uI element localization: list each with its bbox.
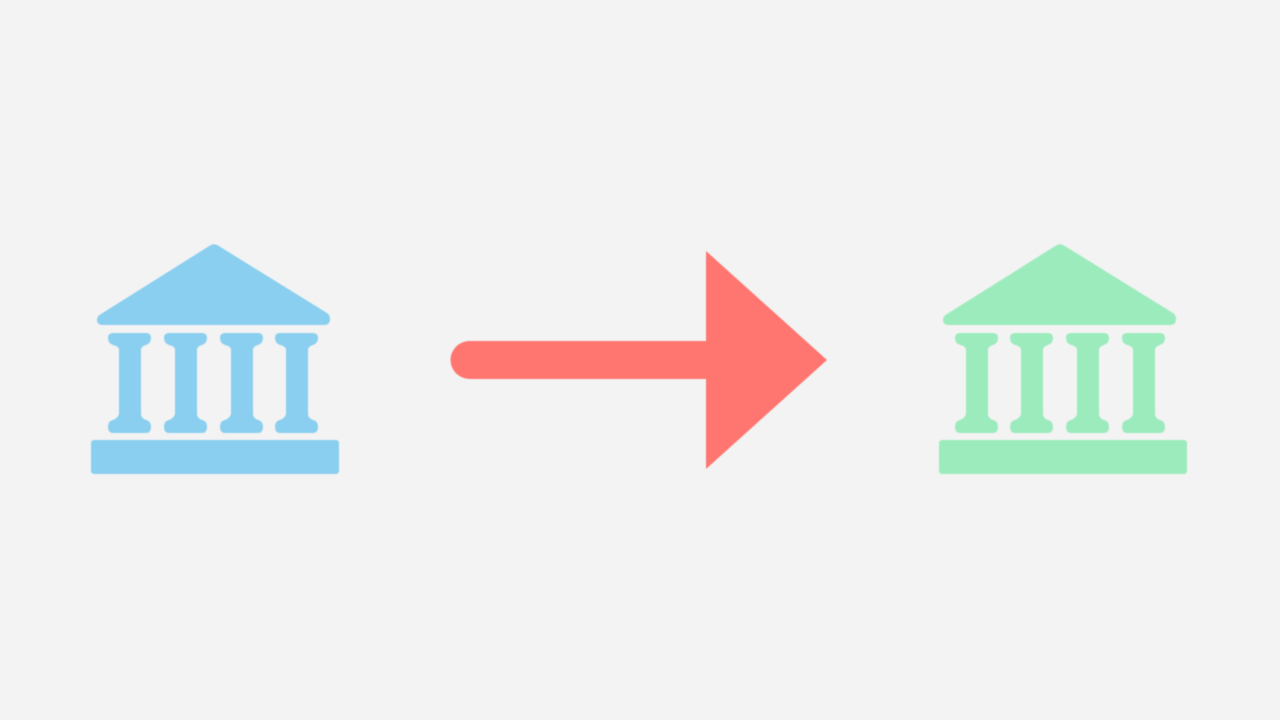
icon: blue bank building bbox=[91, 244, 339, 474]
column 3 bbox=[220, 333, 263, 433]
column 3 bbox=[1066, 333, 1109, 433]
arrow: red arrow pointing right bbox=[451, 251, 827, 469]
base bbox=[91, 440, 339, 474]
column 4 bbox=[275, 333, 318, 433]
roof bbox=[97, 244, 330, 325]
column 1 bbox=[108, 333, 151, 433]
column 1 bbox=[955, 333, 998, 433]
icon: green bank building bbox=[939, 244, 1187, 474]
base bbox=[939, 440, 1187, 474]
column 2 bbox=[1010, 333, 1053, 433]
roof bbox=[943, 244, 1176, 325]
column 4 bbox=[1122, 333, 1165, 433]
column 2 bbox=[164, 333, 207, 433]
